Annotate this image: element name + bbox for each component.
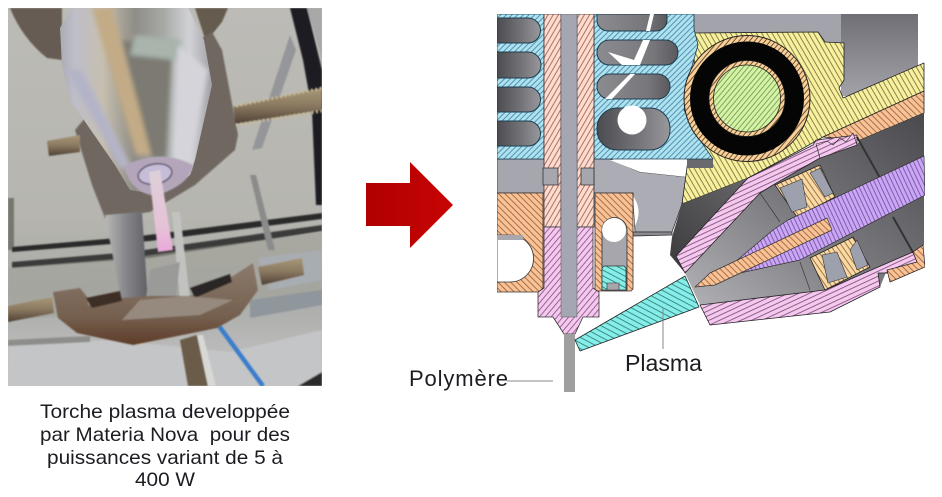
green core [714, 65, 780, 132]
pink lower nozzle wall [700, 252, 917, 325]
ring around the central conduit [684, 36, 810, 162]
blue block, right [594, 14, 713, 159]
torch outlet face [124, 157, 193, 196]
polymer label: Polymère [409, 366, 508, 391]
polymer filament [564, 334, 575, 392]
pink upper nozzle wall [676, 135, 857, 273]
plasma cone [575, 276, 699, 351]
upper thread teeth [816, 133, 857, 158]
lower copper fins [810, 237, 870, 290]
polymer leader line [507, 380, 553, 382]
right screw [233, 88, 322, 125]
central pink tube [543, 14, 594, 227]
panel: cross-section diagram [497, 14, 925, 392]
dark grey rear block [841, 14, 918, 96]
caption: par Materia Nova pour des [40, 424, 290, 446]
central bore [561, 14, 577, 317]
plasma label: Plasma [625, 350, 702, 376]
metal cone of the torch [55, 8, 215, 198]
panel: photo of plasma torch [8, 8, 322, 386]
orange left block [497, 193, 543, 292]
plasma leader line [662, 308, 664, 349]
left slots [497, 18, 541, 146]
white gaps seen through slots [618, 106, 646, 134]
yellow body [682, 32, 924, 204]
right slots [597, 14, 678, 150]
caption: puissances variant de 5 à [47, 447, 283, 469]
top-right mounting plate [194, 8, 228, 38]
orange central electrode [695, 218, 832, 287]
C-clamp [8, 258, 304, 345]
cyan insert [602, 266, 626, 290]
caption [40, 401, 290, 491]
left screw [47, 135, 80, 156]
caption: Torche plasma developpée [40, 401, 290, 423]
pink nozzle [538, 227, 599, 334]
blue block, left [497, 14, 544, 159]
slot in right block [602, 218, 627, 290]
grey top housing [694, 14, 841, 42]
small grey block [687, 159, 713, 168]
blue wire [219, 326, 263, 386]
top-left mounting plate [8, 8, 62, 60]
caption: 400 W [135, 469, 196, 491]
lower orange threads [887, 245, 925, 282]
white opening in left block [497, 235, 534, 282]
orange thread strip [823, 91, 924, 140]
arrow [366, 162, 453, 248]
orange right block [595, 193, 633, 291]
torch interior [670, 113, 924, 305]
upper copper fins [775, 165, 835, 217]
support rods [105, 212, 216, 386]
grey lower housing [497, 159, 687, 236]
support arm [75, 32, 238, 218]
plasma jet [149, 170, 173, 252]
purple electrode [735, 156, 925, 273]
photo background: blurred cables and frame [8, 8, 322, 386]
